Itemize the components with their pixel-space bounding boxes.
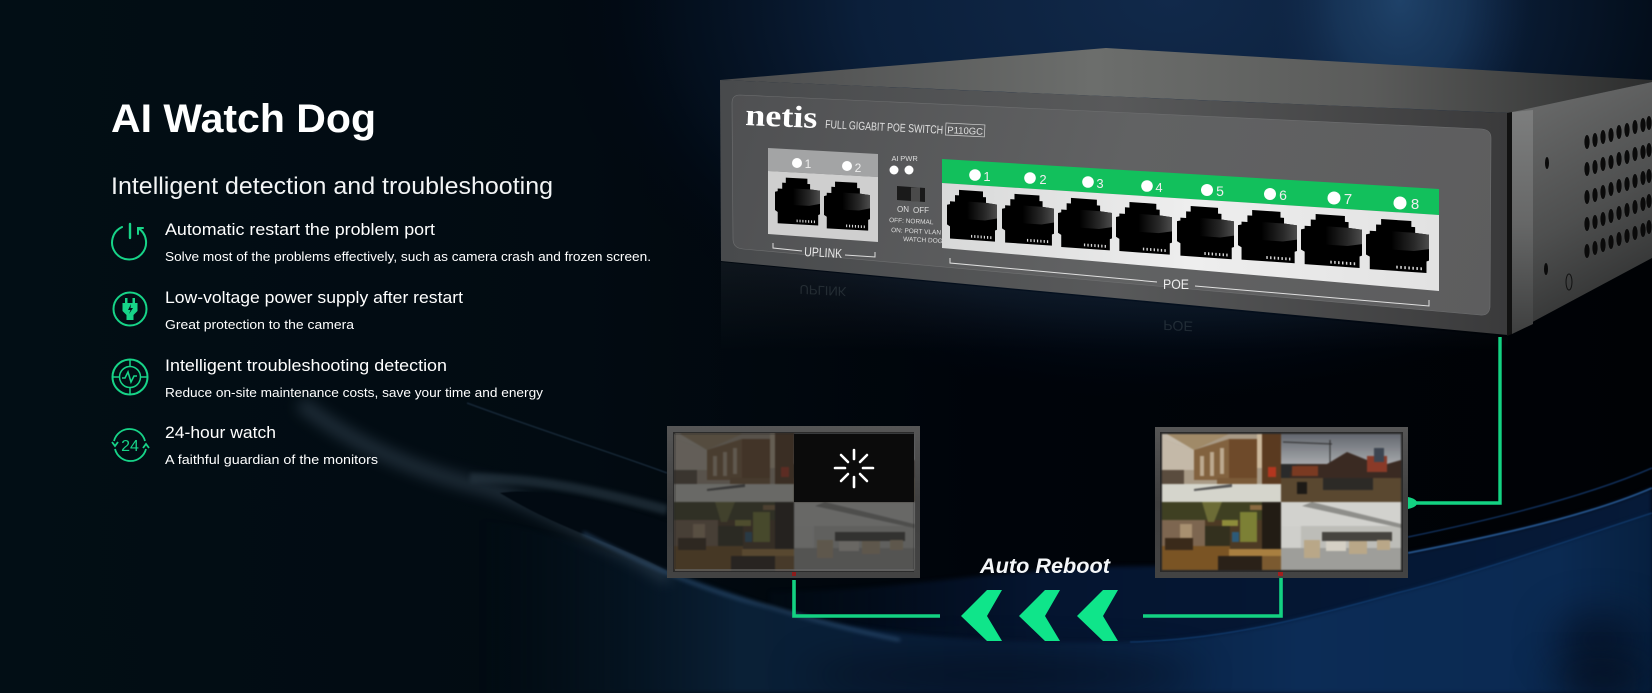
uplink ports block: 2 xyxy=(855,161,862,175)
connector: right monitor wire xyxy=(1143,578,1281,616)
PoE ports block: 8 xyxy=(1411,196,1419,213)
PoE ports block: 5 xyxy=(1216,183,1224,199)
description: Great protection to the camera xyxy=(165,317,355,332)
heading: 24-hour watch xyxy=(165,423,276,442)
model badge: P110GC xyxy=(947,125,983,138)
PoE ports block: 2 xyxy=(1039,172,1047,187)
heading: Intelligent troubleshooting detection xyxy=(165,356,447,375)
uplink ports block xyxy=(768,148,878,242)
PoE label xyxy=(950,258,1429,306)
title: AI Watch Dog xyxy=(111,97,376,141)
logo: netis: netis xyxy=(745,97,818,135)
status LEDs xyxy=(890,154,918,174)
mode switch: ON: PORT VLAN xyxy=(891,227,941,237)
status LEDs: AI xyxy=(891,154,899,163)
reflection of switch: UPLINK xyxy=(800,282,847,299)
model line: FULL GIGABIT POE SWITCH xyxy=(825,119,943,137)
side face xyxy=(1507,82,1652,336)
PoE ports block: 1 xyxy=(983,169,991,184)
status LEDs: PWR xyxy=(900,154,918,163)
mode switch xyxy=(889,186,943,245)
icon: plug xyxy=(114,292,146,326)
front face xyxy=(720,80,1508,335)
heading: Automatic restart the problem port xyxy=(165,220,435,239)
feature: 24-hour watch xyxy=(112,423,379,467)
PoE ports block: 3 xyxy=(1096,176,1104,191)
icon: 24 hours xyxy=(112,429,149,461)
feature: automatic restart xyxy=(112,220,651,264)
description: Reduce on-site maintenance costs, save your time and energy xyxy=(165,385,544,400)
icon: 24 hours: 24 xyxy=(121,438,139,455)
inset faceplate xyxy=(732,95,1491,315)
uplink ports block: 1 xyxy=(805,157,812,171)
arrows: reboot direction xyxy=(961,590,1118,641)
uplink label xyxy=(773,243,875,261)
mode switch: WATCH DOG xyxy=(903,236,943,245)
reflection of switch: POE xyxy=(1163,317,1193,335)
mode switch: OFF xyxy=(913,206,929,215)
PoE ports block xyxy=(942,159,1439,291)
PoE label: POE xyxy=(1163,276,1189,292)
uplink label: UPLINK xyxy=(804,244,843,261)
feature list xyxy=(112,220,651,467)
network switch xyxy=(720,48,1652,336)
subtitle: Intelligent detection and troubleshooting xyxy=(111,173,553,200)
monitor: working xyxy=(1155,427,1408,578)
heading: Low-voltage power supply after restart xyxy=(165,288,463,307)
mode switch: OFF: NORMAL xyxy=(889,217,934,226)
monitor: frozen xyxy=(667,426,920,578)
mode switch: ON xyxy=(897,205,909,214)
connector: switch to monitor xyxy=(1408,337,1500,509)
description: Solve most of the problems effectively, such as camera crash and frozen screen. xyxy=(165,249,651,264)
icon: power restart xyxy=(112,224,146,259)
icon: loading spinner xyxy=(835,450,873,487)
feature: low-voltage supply xyxy=(114,288,463,332)
top surface xyxy=(720,48,1652,113)
label: auto reboot: Auto Reboot xyxy=(979,555,1111,578)
PoE ports block: 4 xyxy=(1155,180,1163,195)
reflection of switch xyxy=(721,262,1508,425)
icon: pulse radar xyxy=(112,360,148,394)
feature: troubleshooting detection xyxy=(112,356,544,400)
connector: left monitor wire xyxy=(794,580,940,616)
PoE ports block: 6 xyxy=(1279,187,1287,203)
description: A faithful guardian of the monitors xyxy=(165,452,379,467)
PoE ports block: 7 xyxy=(1344,191,1352,208)
